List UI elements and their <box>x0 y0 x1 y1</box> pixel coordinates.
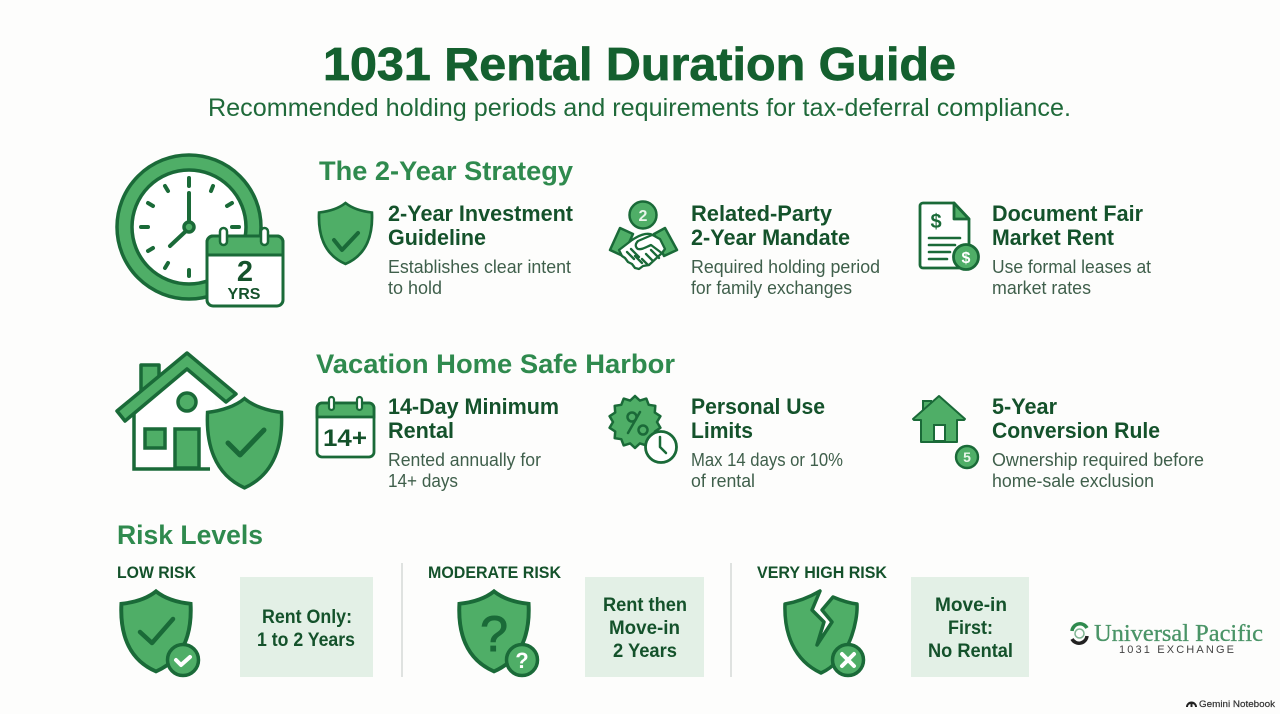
callout: move-in first <box>911 577 1029 677</box>
item: 2-year investment guideline: Guideline <box>388 225 486 250</box>
item: personal use limits: Max 14 days or 10% <box>691 450 843 470</box>
item: 14-day minimum rental: Rented annually for <box>388 450 541 470</box>
icon: 14+ calendar <box>317 397 374 457</box>
item: 2-year investment guideline <box>319 201 574 298</box>
item: 14-day minimum rental <box>317 394 559 491</box>
panel: very high risk <box>757 563 1029 677</box>
icon: house with 5 badge: 5 <box>963 449 971 465</box>
icon: document with dollar: $ <box>930 211 942 233</box>
item: personal use limits: Limits <box>691 418 753 443</box>
callout: rent then move-in: 2 Years <box>613 640 677 662</box>
icon: moderate risk shield: ? <box>480 606 508 662</box>
item: 2-year investment guideline: to hold <box>388 278 442 298</box>
heading: vacation home safe harbor: Vacation Home Safe Harbor <box>316 349 675 379</box>
icon: document with dollar: $ <box>962 250 971 267</box>
callout: rent only: Rent Only: <box>262 606 352 628</box>
item: 5-year conversion rule: 5-Year <box>992 394 1057 419</box>
icon: clock with 2 years calendar: YRS <box>228 286 261 303</box>
title: 1031 Rental Duration Guide <box>323 38 956 90</box>
callout: rent only <box>240 577 373 677</box>
item: personal use limits: Personal Use <box>691 394 825 419</box>
panel: very high risk: VERY HIGH RISK <box>757 563 888 582</box>
icon: handshake with 2 badge <box>610 202 677 269</box>
item: related-party mandate <box>610 201 880 298</box>
callout: move-in first: No Rental <box>928 640 1013 662</box>
item: document fair market rent: Use formal leases at <box>992 257 1151 277</box>
item: document fair market rent <box>920 201 1151 298</box>
item: personal use limits <box>610 394 843 491</box>
item: document fair market rent: Document Fair <box>992 201 1143 226</box>
panel: moderate risk: MODERATE RISK <box>428 563 562 582</box>
icon: document with dollar <box>920 203 978 270</box>
callout: rent then move-in <box>585 577 704 677</box>
icon: shield with check <box>319 203 372 264</box>
item: 5-year conversion rule: Conversion Rule <box>992 418 1160 443</box>
callout: rent only: 1 to 2 Years <box>257 629 355 651</box>
callout: rent then move-in: Move-in <box>609 617 680 639</box>
item: personal use limits: of rental <box>691 471 755 491</box>
heading: risk levels: Risk Levels <box>117 520 263 550</box>
heading: the 2-year strategy: The 2-Year Strategy <box>319 156 573 186</box>
icon: clock with 2 years calendar <box>117 155 283 306</box>
item: related-party mandate: for family exchanges <box>691 278 852 298</box>
watermark: gemini notebook: Gemini Notebook <box>1199 699 1275 710</box>
icon: percent badge with clock <box>610 396 676 462</box>
item: 14-day minimum rental: Rental <box>388 418 454 443</box>
logo: universal pacific 1031 exchange: Universal Pacific <box>1094 621 1263 647</box>
callout: move-in first: First: <box>948 617 993 639</box>
item: related-party mandate: Related-Party <box>691 201 833 226</box>
subtitle: Recommended holding periods and requirements for tax-deferral compliance. <box>208 94 1071 122</box>
icon: broken shield <box>785 591 864 676</box>
icon: house with shield <box>117 353 282 488</box>
item: 14-day minimum rental: 14+ days <box>388 471 458 491</box>
logo: universal pacific 1031 exchange <box>1072 621 1263 656</box>
icon: handshake with 2 badge: 2 <box>639 208 648 225</box>
icon: clock with 2 years calendar: 2 <box>237 256 253 288</box>
item: 14-day minimum rental: 14-Day Minimum <box>388 394 559 419</box>
panel: low risk <box>117 563 373 677</box>
item: document fair market rent: Market Rent <box>992 225 1115 250</box>
item: 2-year investment guideline: Establishes clear intent <box>388 257 571 277</box>
panel: low risk: LOW RISK <box>117 563 197 582</box>
item: 5-year conversion rule: home-sale exclusion <box>992 471 1154 491</box>
icon: moderate risk shield: ? <box>515 648 529 673</box>
icon: house with 5 badge <box>913 396 978 468</box>
icon: 14+ calendar: 14+ <box>323 425 367 452</box>
item: 5-year conversion rule <box>913 394 1204 491</box>
icon: low risk shield <box>121 591 198 676</box>
logo: universal pacific 1031 exchange: 1031 EXCHANGE <box>1119 644 1234 656</box>
item: related-party mandate: 2-Year Mandate <box>691 225 850 250</box>
callout: rent then move-in: Rent then <box>603 594 687 616</box>
panel: moderate risk <box>428 563 704 677</box>
item: 2-year investment guideline: 2-Year Investment <box>388 201 574 226</box>
icon: moderate risk shield <box>459 591 538 676</box>
item: document fair market rent: market rates <box>992 278 1091 298</box>
item: 5-year conversion rule: Ownership required before <box>992 450 1204 470</box>
item: related-party mandate: Required holding period <box>691 257 880 277</box>
callout: move-in first: Move-in <box>935 594 1007 616</box>
